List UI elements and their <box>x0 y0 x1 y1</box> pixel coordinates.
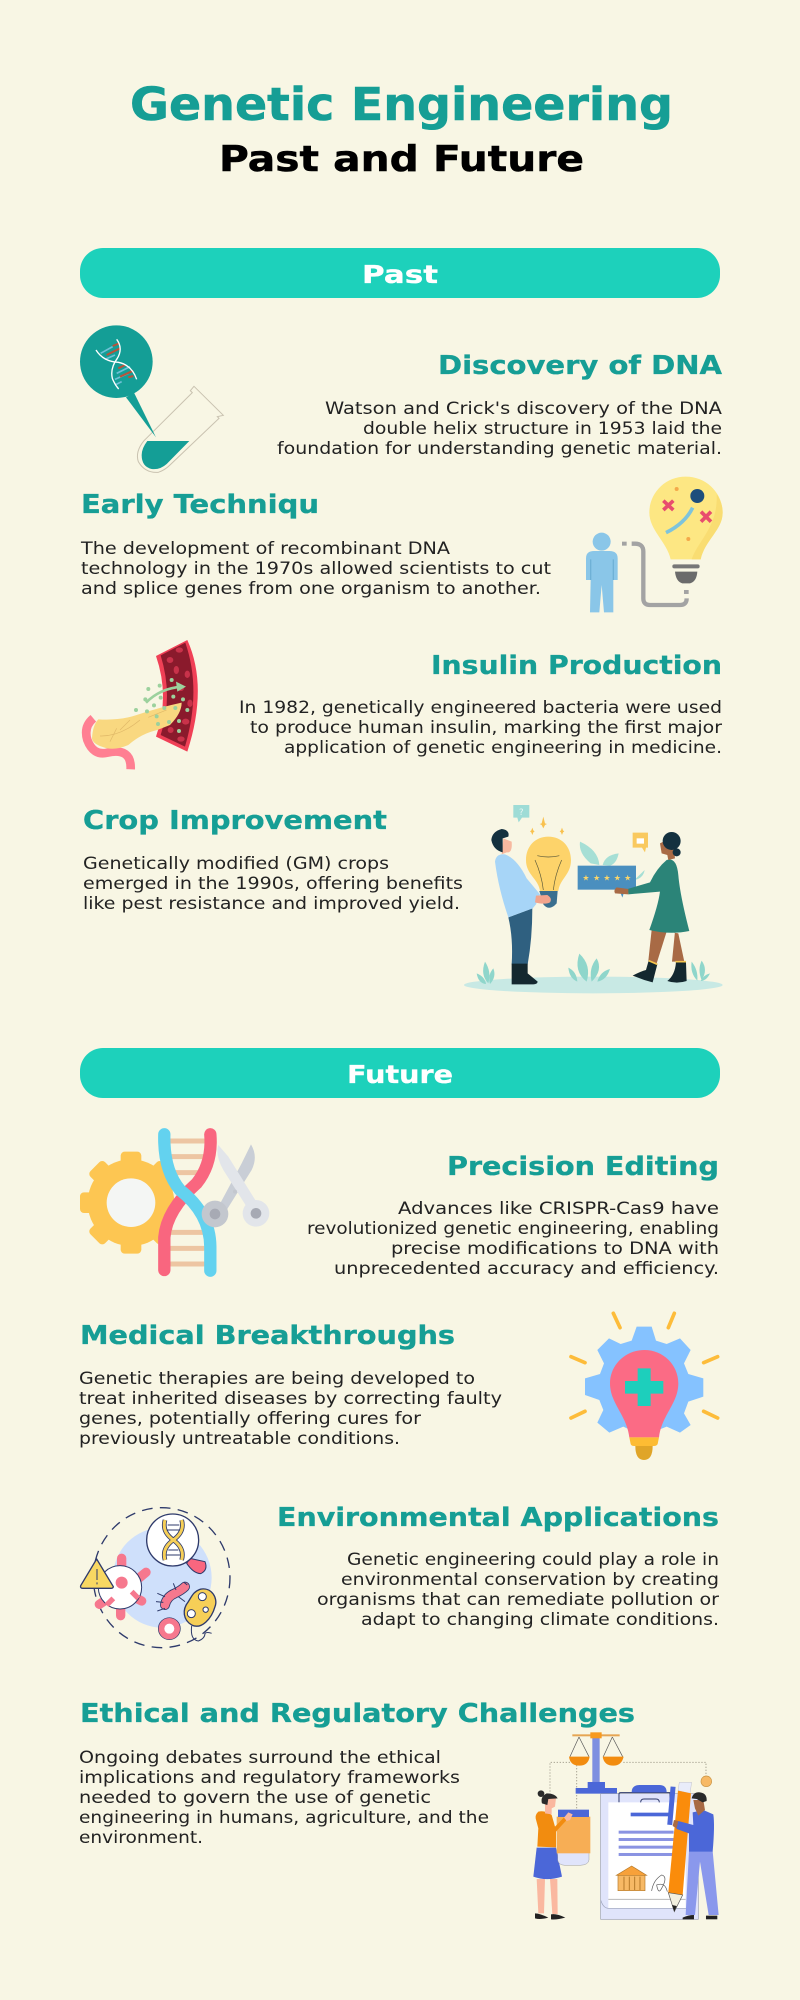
text: Precision Editing description: Advances like CRISPR-Cas9 have <box>398 1199 719 1218</box>
icon: DNA magnified from test tube <box>80 325 223 472</box>
text: Insulin Production description: application of genetic engineering in medicine. <box>284 738 722 757</box>
text: Precision Editing description: revolutionized genetic engineering, enabling <box>307 1219 719 1238</box>
text: Environmental Applications description: environmental conservation by creating <box>341 1570 719 1589</box>
text: Crop Improvement description: emerged in the 1990s, offering benefits <box>83 874 463 893</box>
text: Crop Improvement description: Genetically modified (GM) crops <box>83 854 389 873</box>
text: Ethical and Regulatory Challenges description: environment. <box>79 1828 203 1847</box>
heading: Discovery of DNA: Discovery of DNA <box>438 351 722 381</box>
icon detail: woman holding rating board: ★ <box>603 874 611 883</box>
panel: Ethical and Regulatory Challenges <box>79 1699 719 1919</box>
icon: person and idea bulb <box>586 477 723 612</box>
panel: Insulin Production <box>86 640 722 769</box>
text: Medical Breakthroughs description: previously untreatable conditions. <box>79 1429 400 1448</box>
text: Medical Breakthroughs description: Genetic therapies are being developed to <box>79 1369 475 1388</box>
heading: Insulin Production: Insulin Production <box>431 651 722 681</box>
text: Early Techniques description <box>80 539 552 598</box>
heading: Environmental Applications: Environmental Applications <box>277 1503 719 1533</box>
text: Ethical and Regulatory Challenges description <box>79 1748 489 1847</box>
text: Medical Breakthroughs description: genes, potentially offering cures for <box>79 1409 421 1428</box>
icon detail: woman holding rating board: ★ <box>582 874 590 883</box>
text: Ethical and Regulatory Challenges description: engineering in humans, agriculture, and the <box>79 1808 489 1827</box>
text: Insulin Production description: In 1982, genetically engineered bacteria were used <box>239 698 722 717</box>
icon: pancreas and blood vessel <box>86 640 198 769</box>
icon: scales, legal document and two people <box>533 1732 719 1919</box>
text: Discovery of DNA description: double helix structure in 1953 laid the <box>363 419 722 438</box>
title <box>130 78 673 180</box>
text: Crop Improvement description <box>83 854 463 913</box>
icon: two people with bulb and rating board: ? <box>519 808 524 818</box>
heading: Medical Breakthroughs: Medical Breakthroughs <box>80 1321 455 1351</box>
panel: Early Techniques <box>80 477 723 612</box>
text: Environmental Applications description: Genetic engineering could play a role in <box>347 1550 719 1569</box>
text: Ethical and Regulatory Challenges description: Ongoing debates surround the ethical <box>79 1748 441 1767</box>
text: Ethical and Regulatory Challenges description: implications and regulatory frameworks <box>79 1768 460 1787</box>
text: Ethical and Regulatory Challenges description: needed to govern the use of genetic <box>79 1788 431 1807</box>
heading: Early Techniqu: Early Techniqu <box>81 490 319 520</box>
text: Discovery of DNA description: foundation for understanding genetic material. <box>277 439 722 458</box>
text: Discovery of DNA description <box>277 399 723 458</box>
panel: Crop Improvement <box>83 805 723 993</box>
icon detail: man holding bulb <box>491 829 571 984</box>
heading: Crop Improvement: Crop Improvement <box>83 806 387 836</box>
text: Crop Improvement description: like pest resistance and improved yield. <box>83 894 460 913</box>
section banner: Past: Past <box>362 260 438 289</box>
icon: two people with bulb and rating board <box>464 805 723 993</box>
text: Insulin Production description: to produce human insulin, marking the first major <box>250 718 722 737</box>
heading: Ethical and Regulatory Challenges: Ethical and Regulatory Challenges <box>80 1699 635 1729</box>
icon: microorganisms under magnifier <box>81 1508 230 1648</box>
text: Discovery of DNA description: Watson and Crick's discovery of the DNA <box>325 399 723 418</box>
panel: Discovery of DNA <box>80 325 723 472</box>
panel: Precision Editing <box>80 1134 719 1278</box>
text: Precision Editing description <box>307 1199 719 1278</box>
section banner: Past <box>80 248 720 298</box>
title: Genetic Engineering <box>130 78 673 131</box>
text: Precision Editing description: unprecedented accuracy and efficiency. <box>334 1259 719 1278</box>
icon detail: man with pencil <box>673 1792 719 1919</box>
section banner: Future: Future <box>347 1060 453 1089</box>
icon detail: woman holding rating board: ★ <box>614 874 621 883</box>
text: Environmental Applications description <box>317 1550 719 1629</box>
panel: Medical Breakthroughs <box>79 1313 718 1460</box>
icon: medical bulb in gear <box>571 1313 718 1460</box>
icon detail: woman holding rating board: ★ <box>624 874 631 883</box>
text: Early Techniques description: The development of recombinant DNA <box>80 539 451 558</box>
icon: gear, DNA and scissors <box>80 1134 269 1271</box>
text: Insulin Production description <box>239 698 722 757</box>
text: Precision Editing description: precise modifications to DNA with <box>391 1239 719 1258</box>
title: Past and Future <box>219 139 584 180</box>
text: Environmental Applications description: adapt to changing climate conditions. <box>361 1610 719 1629</box>
text: Early Techniques description: and splice genes from one organism to another. <box>81 579 541 598</box>
text: Environmental Applications description: organisms that can remediate pollution or <box>317 1590 719 1609</box>
panel: Environmental Applications <box>81 1503 719 1648</box>
text: Medical Breakthroughs description: treat inherited diseases by correcting faulty <box>79 1389 502 1408</box>
section banner: Future <box>80 1048 720 1098</box>
text: Medical Breakthroughs description <box>79 1369 502 1448</box>
icon detail: woman with folder <box>533 1790 590 1919</box>
text: Early Techniques description: technology in the 1970s allowed scientists to cut <box>81 559 552 578</box>
icon detail: woman holding rating board: ★ <box>593 874 600 883</box>
icon detail: woman holding rating board <box>578 832 689 983</box>
heading: Precision Editing: Precision Editing <box>447 1152 719 1182</box>
